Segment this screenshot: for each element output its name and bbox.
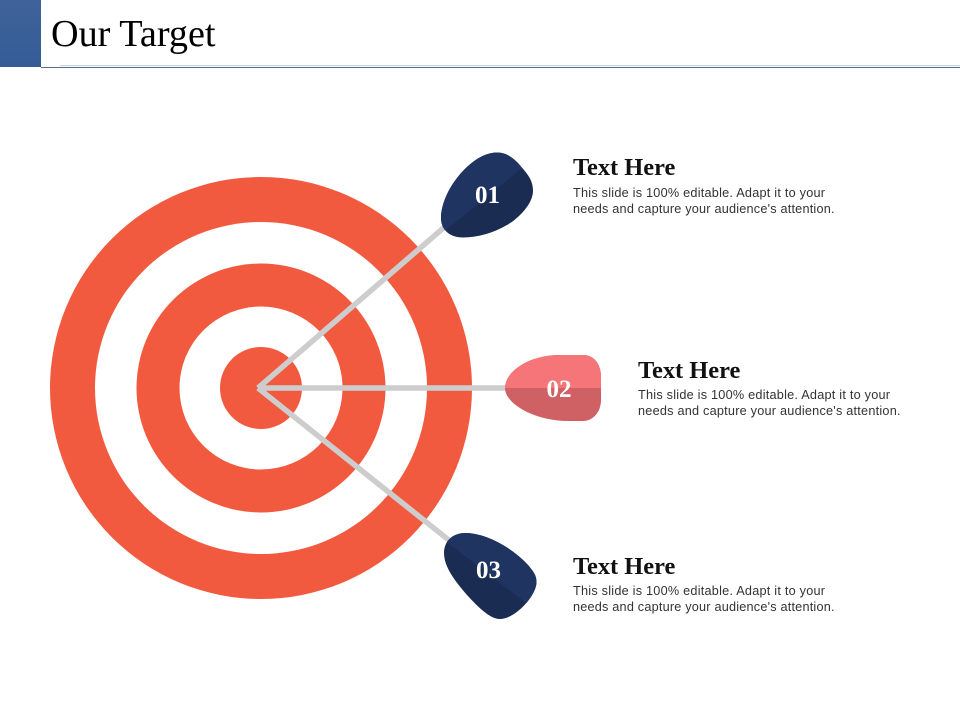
text block 02: Text Here: [638, 357, 740, 384]
header bar: [0, 0, 41, 67]
text block 01: needs and capture your audience's attention.: [573, 202, 834, 216]
text block 02: [638, 357, 900, 418]
text block 03: needs and capture your audience's attention.: [573, 600, 834, 614]
text block 03: This slide is 100% editable. Adapt it to your: [573, 584, 826, 598]
text block 01: [573, 154, 834, 216]
text block 01: This slide is 100% editable. Adapt it to your: [573, 186, 826, 200]
text block 03: [573, 553, 834, 614]
marker 03: 03: [476, 557, 501, 584]
marker 01: 01: [475, 182, 500, 209]
marker 03: [444, 533, 536, 619]
text block 02: needs and capture your audience's attention.: [638, 404, 900, 418]
marker 02: 02: [546, 376, 572, 403]
target: [50, 177, 472, 599]
text block 03: Text Here: [573, 553, 675, 580]
text block 01: Text Here: [573, 154, 675, 181]
title: Our Target: [51, 13, 216, 55]
marker 01: [441, 152, 533, 238]
header rule: [41, 65, 960, 68]
text block 02: This slide is 100% editable. Adapt it to your: [638, 388, 891, 402]
pointer lines: [258, 218, 515, 545]
marker 02: [505, 355, 601, 421]
